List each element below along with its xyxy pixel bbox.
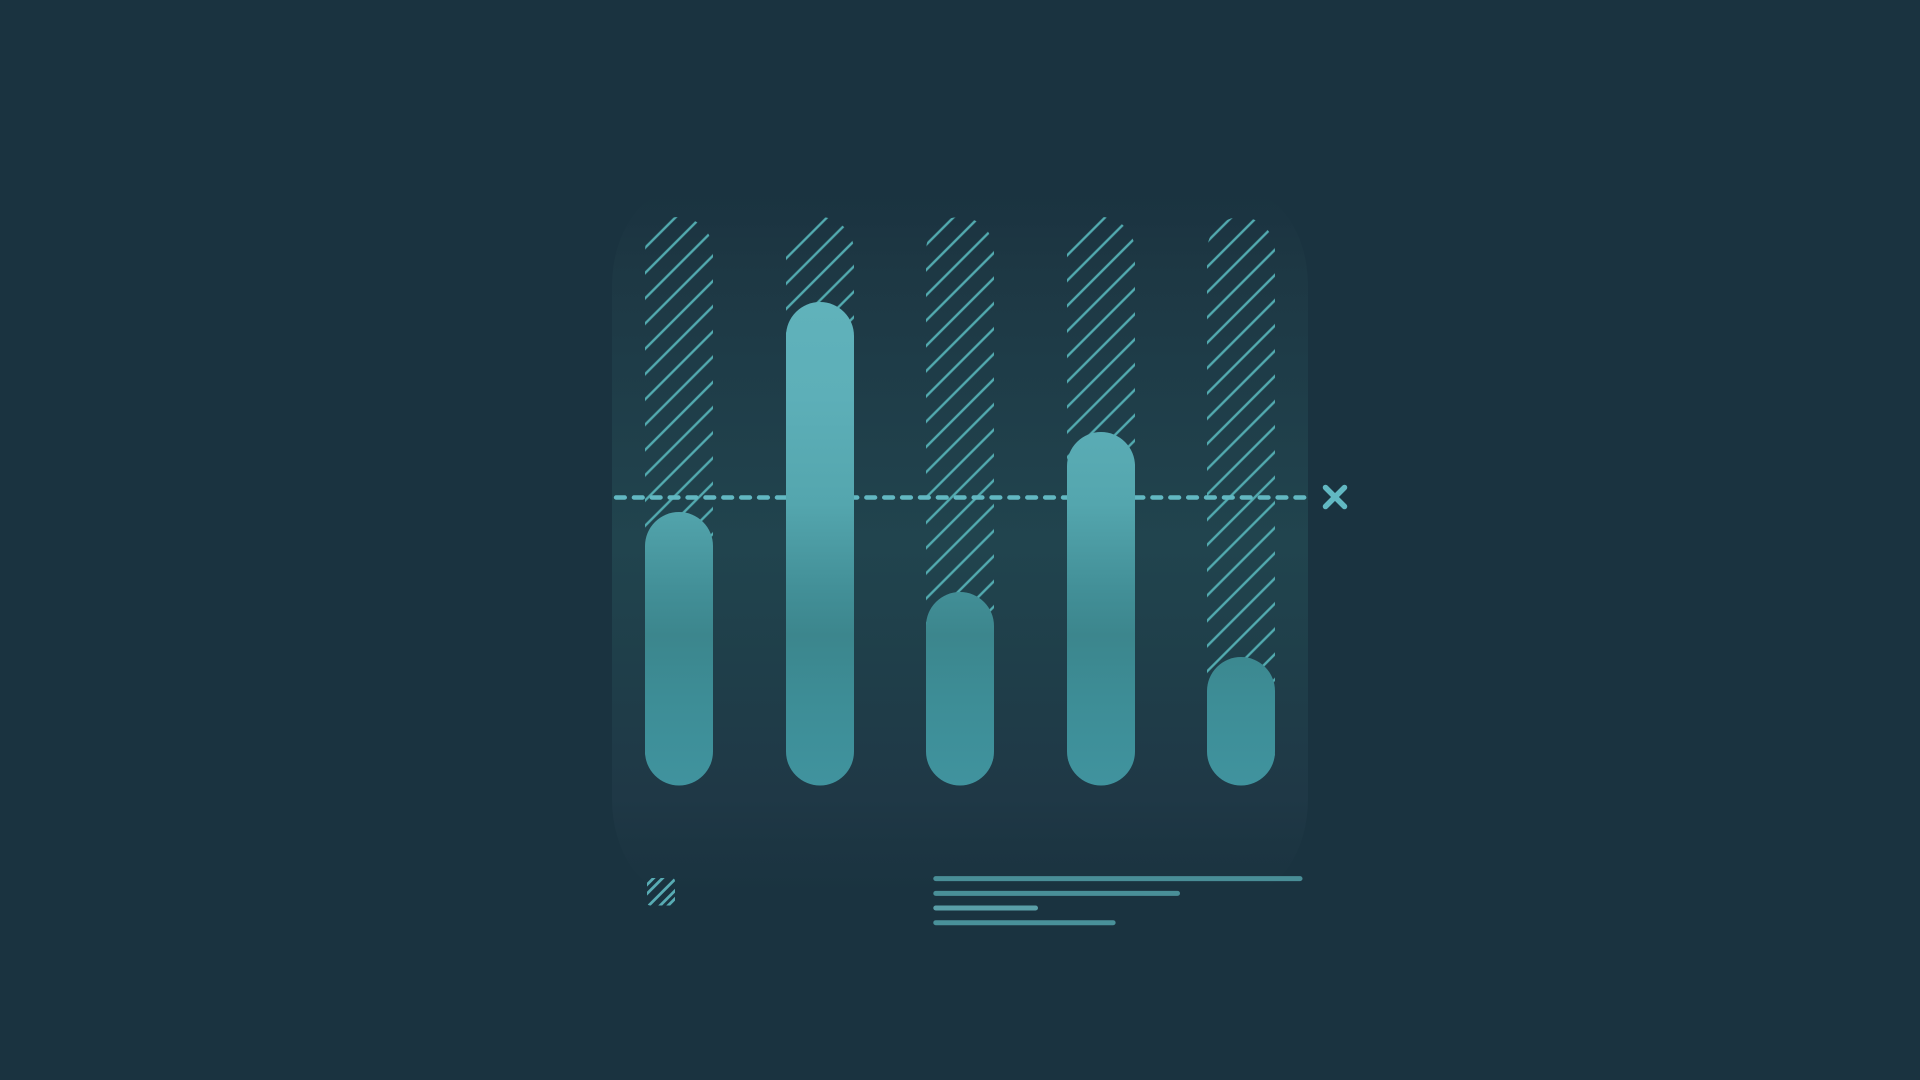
dashed threshold line [616, 495, 1304, 500]
hatched target columns [645, 217, 1275, 785]
panel: chart backdrop [612, 190, 1308, 895]
legend: text placeholder lines [933, 876, 1302, 925]
icon: threshold cross marker [1326, 488, 1344, 506]
bars [645, 302, 1275, 786]
legend: hatch swatch [647, 878, 675, 906]
infographic canvas [612, 217, 1348, 926]
